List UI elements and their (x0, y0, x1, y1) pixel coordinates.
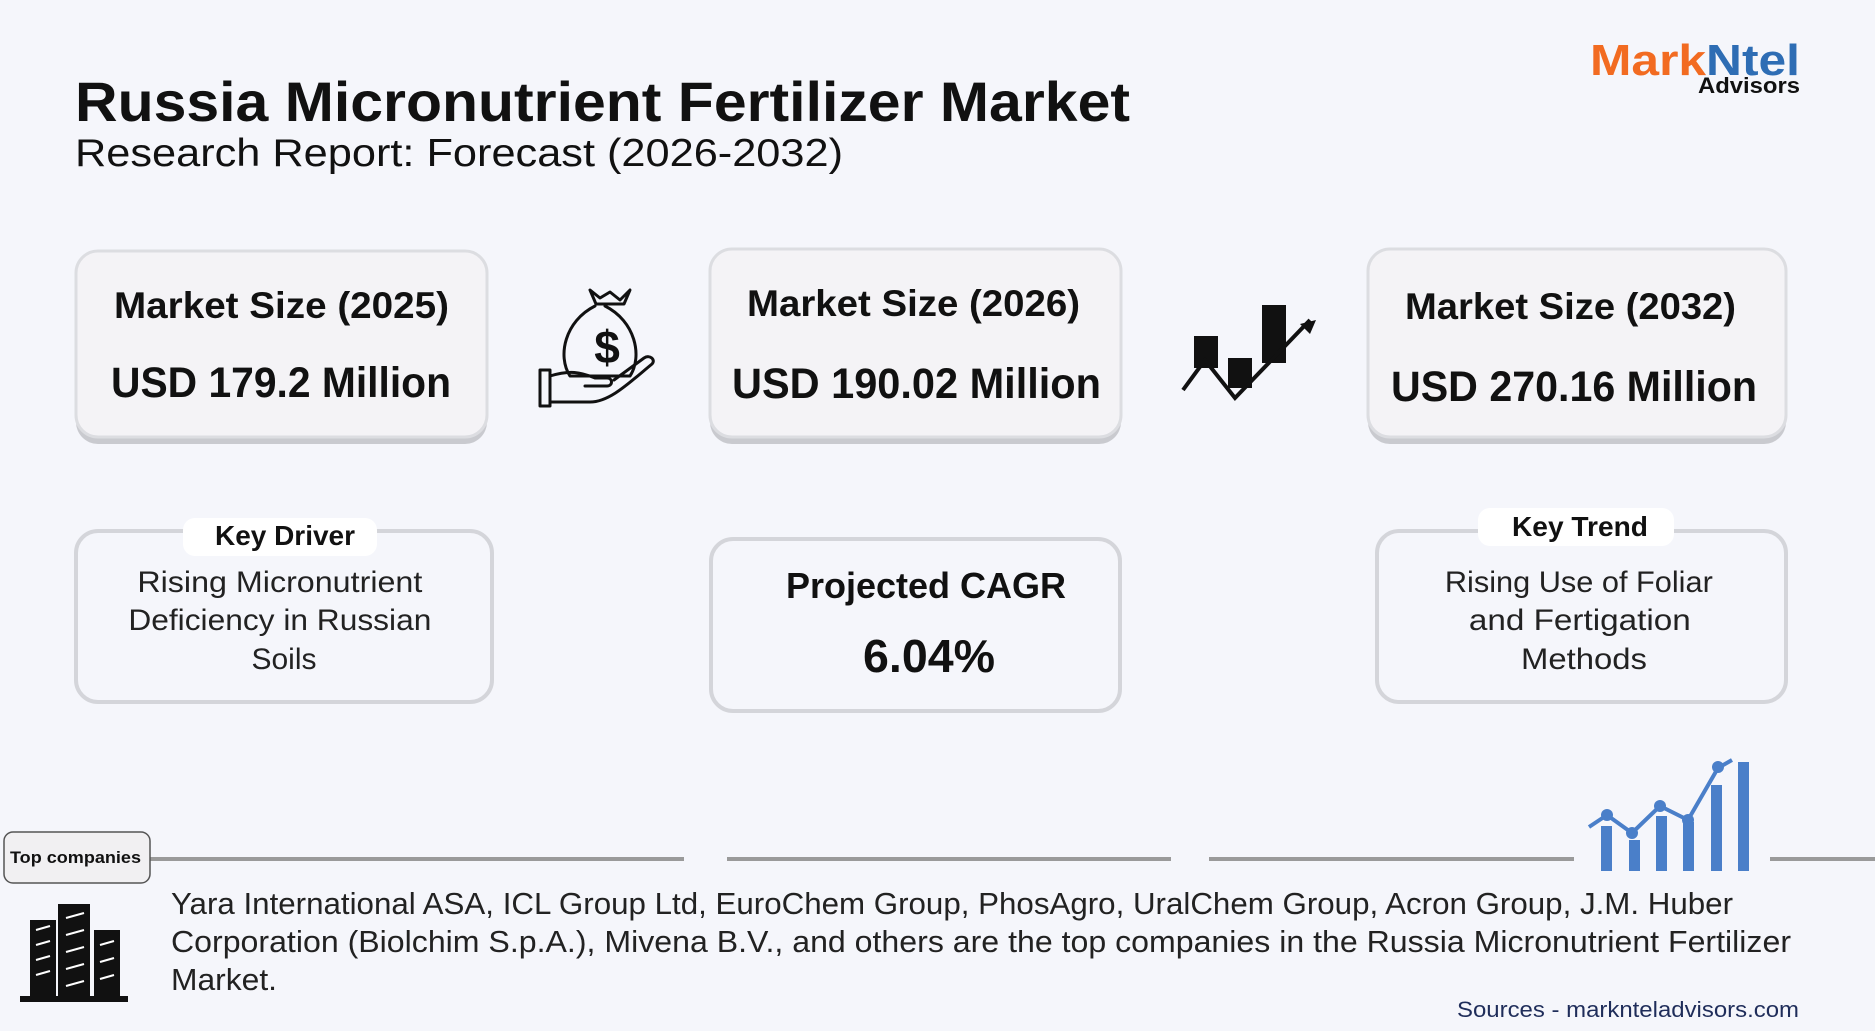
card: market size 2026: USD 190.02 Million (732, 360, 1101, 408)
label pill: key trend: Key Trend (1512, 511, 1648, 542)
text: top companies list (171, 886, 1800, 997)
icon: bar chart with trend line (1589, 760, 1749, 871)
panel: projected CAGR: Projected CAGR (786, 565, 1066, 606)
card: market size 2026 (710, 249, 1121, 444)
panel: key driver: Soils (252, 643, 316, 676)
label: top companies: Top companies (10, 848, 141, 867)
panel: key driver (76, 518, 492, 702)
source note: Sources - marknteladvisors.com (1457, 997, 1799, 1022)
card: market size 2025: Market Size (2025) (114, 285, 449, 326)
card: market size 2032 (1368, 249, 1786, 444)
logo: Mark Ntel (1590, 36, 1800, 85)
label pill: key driver (183, 518, 377, 556)
icon: money bag in hand: $ (594, 321, 620, 373)
card: market size 2025 (76, 251, 487, 444)
label: top companies (4, 832, 150, 883)
card: market size 2026: Market Size (2026) (747, 283, 1080, 324)
card: market size 2025: USD 179.2 Million (111, 359, 451, 407)
icon: buildings (20, 904, 128, 1002)
card: market size 2032: Market Size (2032) (1405, 286, 1736, 327)
panel: key driver: Deficiency in Russian (128, 604, 431, 637)
text: top companies list: Yara International ASA, ICL Group Ltd, EuroChem Group, PhosAgro, UralChem Group, Acron Group, J.M. Huber (171, 886, 1733, 921)
label pill: key driver: Key Driver (215, 520, 355, 551)
panel: projected CAGR (711, 539, 1120, 711)
panel: key trend: Rising Use of Foliar (1445, 566, 1713, 599)
title: Russia Micronutrient Fertilizer Market (75, 70, 1130, 133)
panel: projected CAGR: 6.04% (863, 630, 995, 682)
card: market size 2032: USD 270.16 Million (1391, 363, 1757, 411)
text: top companies list: Market. (171, 962, 277, 997)
panel: key trend: and Fertigation (1469, 604, 1691, 637)
panel: key driver: Rising Micronutrient (137, 566, 423, 599)
icon: money bag in hand (540, 290, 653, 406)
logo: Advisors (1698, 73, 1800, 98)
text: top companies list: Corporation (Biolchim S.p.A.), Mivena B.V., and others are the top companies in the Russia Micronutrient Fertilizer (171, 924, 1791, 959)
panel: key trend: Methods (1521, 643, 1647, 676)
panel: key trend (1377, 508, 1786, 702)
label pill: key trend (1478, 508, 1674, 546)
icon: growth chart arrow (1183, 305, 1316, 398)
subtitle: Research Report: Forecast (2026-2032) (75, 132, 843, 175)
